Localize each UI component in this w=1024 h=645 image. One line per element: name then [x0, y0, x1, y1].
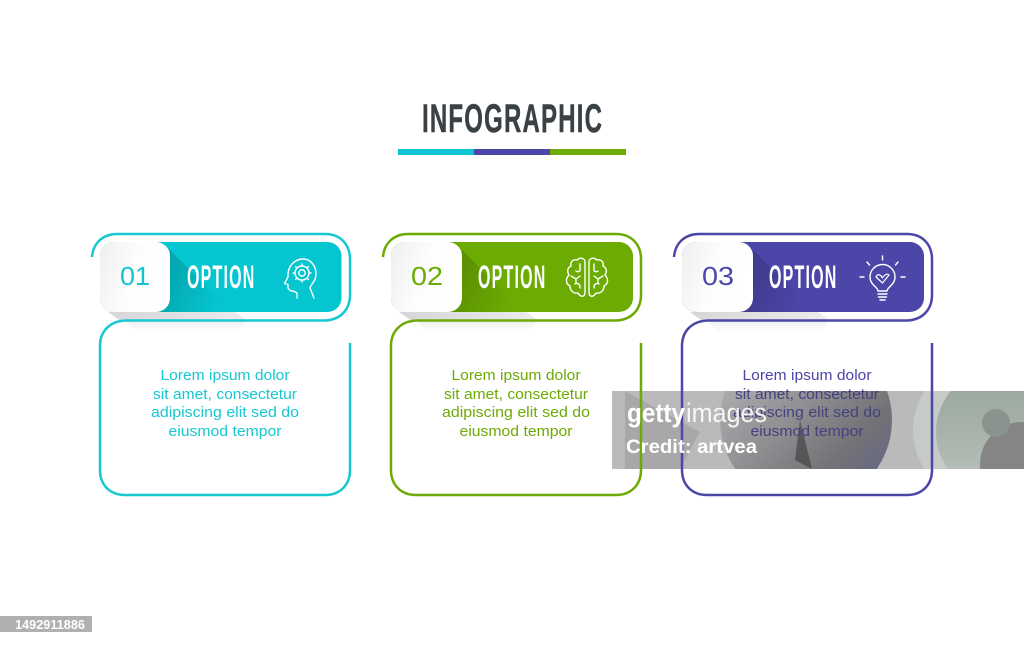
icon: brain: [566, 258, 608, 296]
panel 03 body text: adipiscing elit sed do: [733, 405, 881, 421]
panel 03 body text: eiusmod tempor: [750, 424, 864, 440]
icon: head with gear: [284, 259, 316, 298]
panel 03 number: 03: [702, 261, 734, 291]
panel 02 heading: OPTION: [478, 260, 547, 296]
watermark logo: [627, 398, 767, 428]
panel 02 number tile: [391, 242, 462, 312]
icon: light bulb with check: [860, 256, 905, 300]
panel 01 number tile: [100, 242, 170, 312]
panel 03 drop shadow: [690, 312, 830, 333]
title: INFOGRAPHIC: [422, 96, 603, 140]
panel 03 body text: Lorem ipsum dolor: [742, 368, 872, 384]
watermark credit: Credit: artvea: [626, 436, 757, 458]
panel: option 02: [383, 234, 641, 495]
panel 03 body text: [733, 368, 881, 440]
panel 03 outline: [674, 234, 932, 495]
image id tag: 1492911886: [15, 618, 85, 632]
panel 02 body text: [442, 368, 590, 440]
panel 02 header bar: [391, 242, 633, 312]
watermark logo: images: [686, 398, 767, 428]
panel 01 number: 01: [120, 261, 150, 291]
panel 02 drop shadow: [399, 312, 538, 333]
panel 01 heading: OPTION: [187, 260, 256, 296]
panel 03 body text: sit amet, consectetur: [735, 387, 879, 403]
watermark text: [626, 398, 767, 458]
panel 01 body text: eiusmod tempor: [168, 424, 282, 440]
panel 03 heading: OPTION: [769, 260, 838, 296]
panel 01 drop shadow: [108, 312, 247, 333]
panel 01 body text: [151, 368, 299, 440]
title underline: [398, 149, 626, 155]
panel: option 01: [92, 234, 350, 495]
panel 01 header bar: [100, 242, 342, 312]
panel: option 03: [674, 234, 932, 495]
panel 02 outline: [383, 234, 641, 495]
panel 03 header bar: [682, 242, 924, 312]
panel 02 body text: Lorem ipsum dolor: [452, 368, 581, 384]
panel 01 body text: Lorem ipsum dolor: [160, 368, 290, 384]
panel 02 body text: adipiscing elit sed do: [442, 405, 590, 421]
image id tag: [0, 616, 92, 632]
watermark background band: [612, 391, 1024, 469]
panel 02 number: 02: [411, 261, 443, 291]
panel 02 body text: eiusmod tempor: [460, 424, 573, 440]
panel 01 outline: [92, 234, 350, 495]
panel 01 body text: adipiscing elit sed do: [151, 405, 299, 421]
panel 01 body text: sit amet, consectetur: [153, 387, 297, 403]
panel 02 body text: sit amet, consectetur: [444, 387, 588, 403]
panel 03 number tile: [682, 242, 753, 312]
watermark logo: getty: [627, 398, 685, 428]
